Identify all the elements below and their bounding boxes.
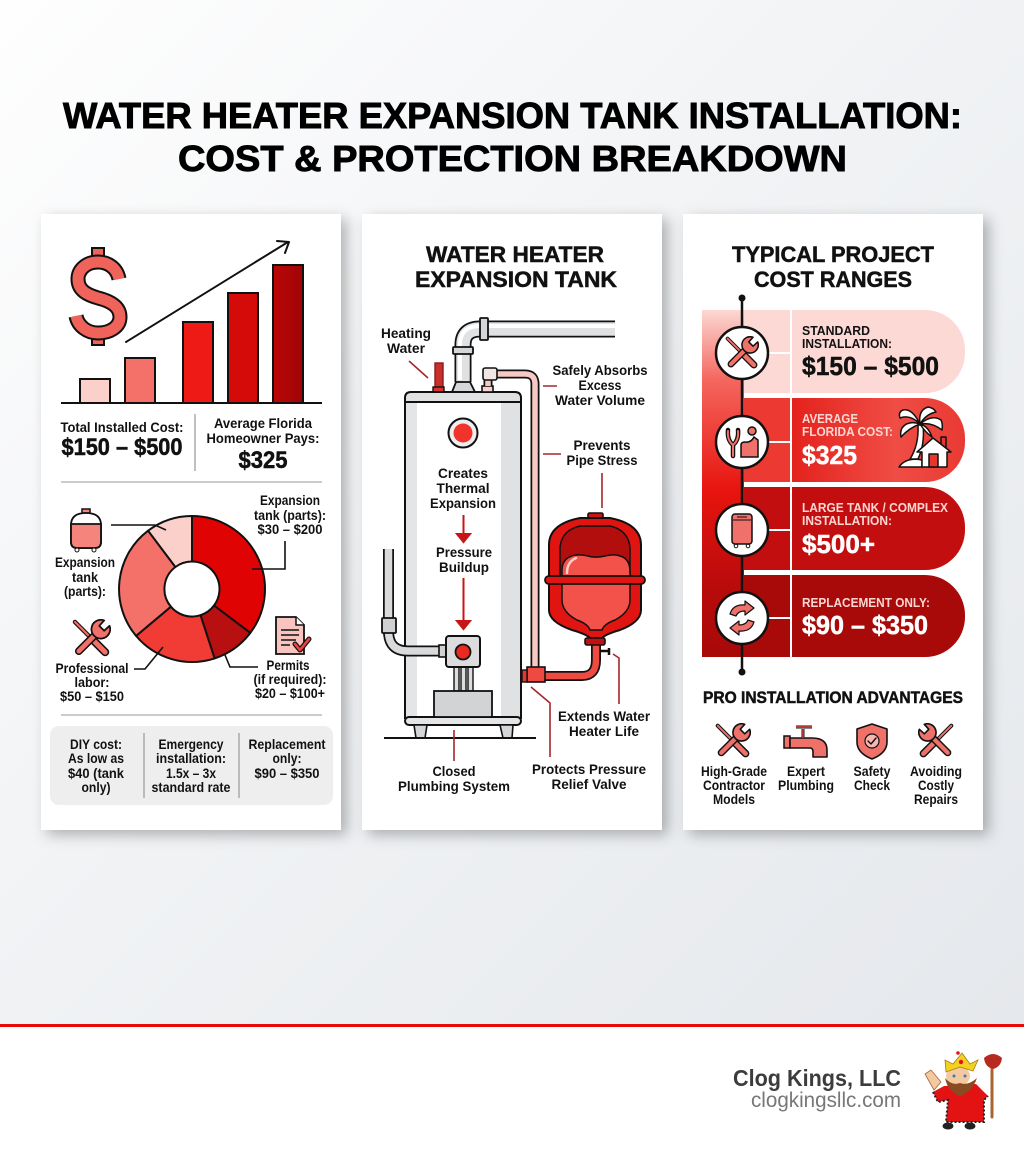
advantage: contractor models: [701, 724, 767, 807]
heading: typical project cost ranges: TYPICAL PROJECT: [732, 242, 935, 267]
label: closed plumbing system: [398, 763, 510, 794]
advantage: avoiding costly repairs: Costly: [918, 777, 954, 793]
advantage: safety check: [854, 724, 891, 793]
label: heating water: Heating: [381, 325, 431, 341]
label: expansion tank parts right: [254, 492, 326, 537]
advantage: avoiding costly repairs: [910, 724, 962, 807]
label: professional labor: Professional: [56, 660, 128, 676]
label: extends heater life: [558, 708, 651, 739]
title: WATER HEATER EXPANSION TANK INSTALLATION:: [63, 95, 962, 136]
row: large tank complex installation: [768, 487, 965, 570]
control valve: [434, 636, 492, 717]
timeline colour column: [702, 310, 790, 657]
text: diy cost: As low as: [68, 750, 124, 766]
cold inlet pipe: [382, 549, 446, 657]
expansion tank: [545, 513, 645, 645]
process label: pressure buildup: Pressure: [436, 544, 492, 560]
label: protects relief valve: Protects Pressure: [532, 761, 646, 777]
icon: palm tree and house: [899, 407, 951, 467]
panel: additional costs: [50, 726, 333, 805]
label: safely absorbs: [552, 362, 648, 408]
panel: water heater diagram: [362, 214, 662, 830]
advantage: contractor models: Contractor: [703, 777, 765, 793]
process labels: thermal expansion: Thermal: [436, 480, 490, 496]
label: permits: Permits: [266, 657, 310, 673]
text: replacement only: $90 – $350: [254, 765, 320, 781]
advantage: contractor models: High-Grade: [701, 763, 767, 779]
title: COST & PROTECTION BREAKDOWN: [178, 138, 847, 179]
stat: total installed cost: [60, 419, 184, 461]
row: large tank complex installation: INSTALLATION:: [802, 514, 892, 528]
label: safely absorbs: Safely Absorbs: [552, 362, 648, 378]
panel: total cost breakdown: [41, 214, 341, 830]
row: replacement only: REPLACEMENT ONLY:: [802, 596, 930, 610]
label: expansion tank parts right: Expansion: [260, 492, 320, 508]
heading: water heater expansion tank: EXPANSION TANK: [415, 267, 617, 292]
footer: [0, 1024, 1024, 1154]
row: standard installation: INSTALLATION:: [802, 337, 892, 351]
donut chart: [119, 516, 265, 662]
stat: average florida homeowner: Homeowner Pays:: [206, 430, 320, 446]
label: heating water: Water: [387, 340, 426, 356]
title: [63, 95, 962, 179]
row: replacement only: $90 – $350: [802, 610, 928, 640]
leader lines: [111, 525, 285, 669]
label: protects relief valve: [532, 761, 646, 792]
label: safely absorbs: Water Volume: [555, 392, 645, 408]
label: expansion tank parts left: tank: [72, 569, 98, 585]
icon: crossed wrenches: [75, 620, 110, 652]
label: expansion tank parts right: $30 – $200: [258, 521, 323, 537]
bar chart: [61, 265, 322, 403]
label: expansion tank parts left: [55, 554, 115, 599]
label: expansion tank parts right: tank (parts):: [254, 507, 326, 523]
process labels: thermal expansion: Expansion: [430, 495, 496, 511]
row: large tank complex installation: $500+: [802, 529, 875, 559]
label: safely absorbs: Excess: [578, 377, 622, 393]
red connector pipework: [522, 645, 609, 682]
advantage: avoiding costly repairs: Avoiding: [910, 763, 962, 779]
text: emergency installation: Emergency: [158, 736, 224, 752]
row: standard installation: [768, 310, 965, 393]
text: replacement only: Replacement: [248, 736, 326, 752]
timeline node: tools: [716, 327, 768, 379]
panel: project cost ranges: [683, 214, 983, 830]
text: replacement only: [248, 736, 326, 781]
text: diy cost: only): [82, 779, 110, 795]
timeline node: tank: [716, 504, 768, 556]
process label: pressure buildup: [436, 544, 492, 575]
timeline node: technician: [716, 416, 768, 468]
label: professional labor: labor:: [74, 674, 110, 690]
stat: average florida homeowner: $325: [238, 447, 288, 474]
stat: average florida homeowner: [206, 415, 320, 474]
stat: total installed cost: $150 – $500: [62, 434, 182, 461]
process labels: thermal expansion: Creates: [438, 465, 488, 481]
advantage: expert plumbing: [778, 727, 834, 793]
label: closed plumbing system: Plumbing System: [398, 778, 510, 794]
row 3 right of the timeline: [744, 487, 790, 570]
process label: pressure buildup: Buildup: [439, 559, 489, 575]
label: extends heater life: Extends Water: [558, 708, 651, 724]
row: average florida cost: FLORIDA COST:: [802, 425, 893, 439]
text: diy cost: DIY cost:: [70, 736, 122, 752]
label: prevents pipe stress: Pipe Stress: [566, 452, 638, 468]
timeline axis: [738, 294, 746, 676]
heading: typical project cost ranges: [732, 242, 935, 292]
icon: dollar sign: [76, 248, 120, 345]
water heater tank: [384, 392, 536, 738]
row: large tank complex installation: LARGE TANK / COMPLEX: [802, 501, 949, 515]
arrow: to valve: [457, 578, 470, 629]
advantage: contractor models: Models: [713, 791, 755, 807]
label: prevents pipe stress: Prevents: [574, 437, 631, 453]
label: protects relief valve: Relief Valve: [552, 776, 627, 792]
text: emergency installation: 1.5x – 3x: [166, 765, 216, 781]
label: permits: $20 – $100+: [255, 685, 325, 701]
timeline node: replacement arrows: [716, 592, 768, 644]
gauge: [448, 418, 478, 448]
label: permits: (if required):: [254, 671, 326, 687]
pink expansion line: [482, 368, 535, 668]
row 2 right of the timeline: [744, 398, 790, 482]
icon: expansion tank: [71, 509, 101, 552]
row: average florida cost: $325: [802, 440, 857, 470]
process labels: thermal expansion: [430, 465, 496, 511]
label: professional labor: [56, 660, 128, 704]
label: professional labor: $50 – $150: [60, 688, 124, 704]
heading: water heater expansion tank: WATER HEATER: [426, 242, 604, 267]
stat: average florida homeowner: Average Florida: [214, 415, 312, 431]
label: closed plumbing system: Closed: [432, 763, 476, 779]
heating water pipe: [433, 363, 444, 392]
row 1 right of the timeline: [744, 310, 790, 393]
king mascot: [925, 1051, 1002, 1130]
icon: permit document: [276, 617, 309, 654]
label: extends heater life: Heater Life: [569, 723, 639, 739]
heading: water heater expansion tank: [415, 242, 617, 292]
heading: pro installation advantages: PRO INSTALLATION ADVANTAGES: [703, 689, 963, 707]
label: expansion tank parts left: Expansion: [55, 554, 115, 570]
label: permits: [254, 657, 326, 701]
arrow: to pressure buildup: [457, 515, 470, 542]
diagram leader lines: [409, 361, 619, 761]
row: average florida cost: [768, 398, 965, 482]
advantage: expert plumbing: Expert: [787, 763, 825, 779]
text: replacement only: only:: [272, 750, 302, 766]
row: standard installation: STANDARD: [802, 324, 870, 338]
row: standard installation: $150 – $500: [802, 351, 939, 381]
brand url: clogkingsllc.com: [751, 1089, 901, 1112]
row 4 right of the timeline: [744, 575, 790, 657]
advantage: expert plumbing: Plumbing: [778, 777, 834, 793]
arrow: rising trend: [126, 241, 289, 342]
advantage: safety check: Safety: [854, 763, 891, 779]
brand name: Clog Kings, LLC: [733, 1065, 901, 1091]
text: emergency installation: installation:: [156, 750, 226, 766]
text: diy cost: [68, 736, 124, 795]
advantage: safety check: Check: [854, 777, 890, 793]
advantage: avoiding costly repairs: Repairs: [914, 791, 958, 807]
text: emergency installation: standard rate: [152, 779, 231, 795]
text: emergency installation: [152, 736, 231, 795]
text: diy cost: $40 (tank: [68, 765, 124, 781]
heading: typical project cost ranges: COST RANGES: [754, 267, 912, 292]
hot water pipe: [452, 318, 615, 392]
label: expansion tank parts left: (parts):: [64, 583, 106, 599]
row: average florida cost: AVERAGE: [802, 412, 858, 426]
label: prevents pipe stress: [566, 437, 638, 468]
stat: total installed cost: Total Installed Cost:: [60, 419, 184, 435]
label: heating water: [381, 325, 431, 356]
row: replacement only: [768, 575, 965, 657]
